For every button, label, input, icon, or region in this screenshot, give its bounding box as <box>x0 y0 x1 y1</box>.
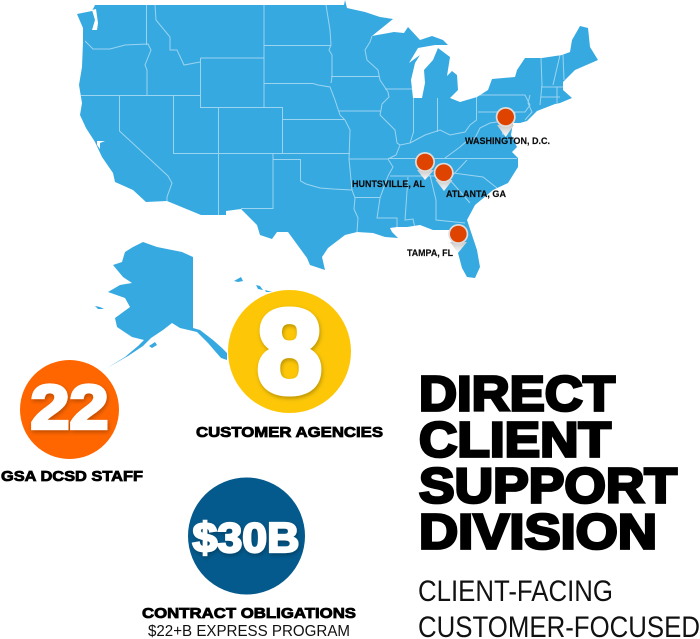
pin: Washington, D.C. <box>496 107 516 137</box>
map: contiguous United States <box>77 0 598 278</box>
number 8: 8 <box>257 286 322 418</box>
blue circle <box>188 478 305 594</box>
title: CLIENT <box>419 414 611 468</box>
landmass <box>77 0 598 278</box>
state borders <box>81 5 565 232</box>
yellow circle <box>228 290 351 413</box>
pin: Atlanta, GA <box>434 163 454 191</box>
city label: Tampa, FL: TAMPA, FL <box>407 248 453 258</box>
pin: Tampa, FL <box>448 224 468 253</box>
title: SUPPORT <box>419 460 677 514</box>
orange circle <box>20 360 119 459</box>
city label: Washington, D.C.: WASHINGTON, D.C. <box>465 136 550 146</box>
stat: $30B contract obligations <box>142 478 356 639</box>
title: DIRECT <box>419 368 615 422</box>
title: DIVISION <box>419 506 657 560</box>
aleutian and coastal islands <box>95 277 272 348</box>
puget sound and san francisco bay <box>92 9 105 149</box>
title <box>419 368 677 560</box>
subtitle: CLIENT-FACING <box>418 575 613 608</box>
stat: 22 GSA DCSD staff <box>1 360 143 485</box>
label: CONTRACT OBLIGATIONS <box>142 605 356 622</box>
label: CUSTOMER AGENCIES <box>196 424 383 441</box>
number $30B: $30B <box>192 514 300 561</box>
number 22: 22 <box>30 374 108 442</box>
label: GSA DCSD STAFF <box>1 468 143 485</box>
subtitle <box>418 575 700 639</box>
pin: Huntsville, AL <box>415 152 435 180</box>
stat: 8 customer agencies <box>196 286 383 441</box>
city label: Atlanta, GA: ATLANTA, GA <box>446 189 507 199</box>
city label: Huntsville, AL: HUNTSVILLE, AL <box>352 179 425 189</box>
map: Alaska <box>95 242 272 368</box>
